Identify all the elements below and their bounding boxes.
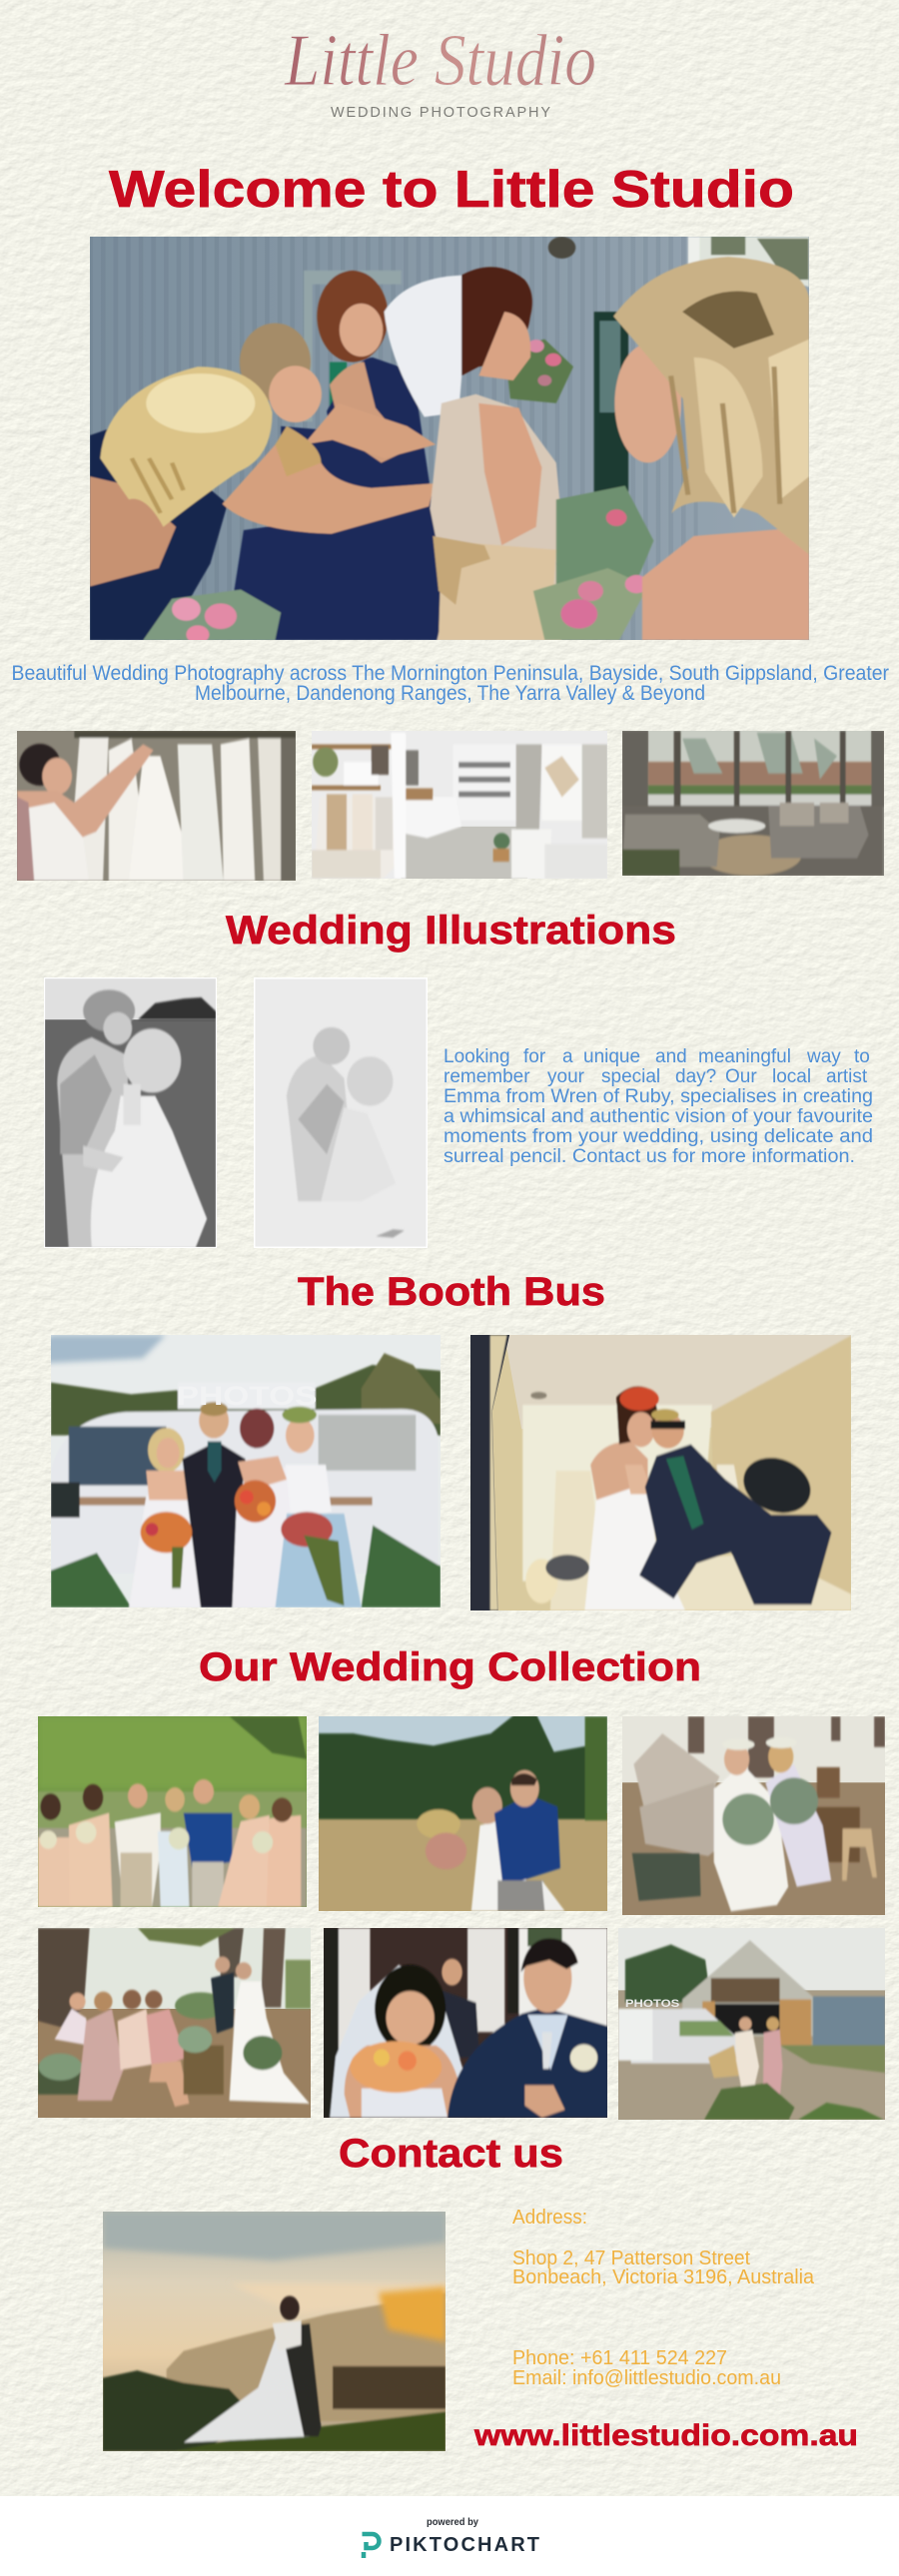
- paragraph: illustration description: Our: [725, 1066, 757, 1087]
- paragraph: illustration description: way: [806, 1046, 841, 1067]
- title: Welcome to Little Studio: [109, 161, 794, 219]
- contact details: Phone: +61 411 524 227: [512, 2347, 727, 2369]
- contact details: [512, 2207, 815, 2389]
- photo: studio lounge: [622, 731, 884, 876]
- photo: gowns on a rack: [17, 731, 296, 881]
- contact details: Shop 2, 47 Patterson Street: [512, 2248, 750, 2269]
- piktochart wordmark: PIKTOCHART: [390, 2534, 539, 2556]
- paragraph: illustration description: your: [547, 1066, 585, 1087]
- photo: brides seated on logs: [622, 1716, 885, 1915]
- paragraph: illustration description: moments from your wedding, using delicate and: [444, 1126, 873, 1147]
- footer: [0, 2496, 899, 2576]
- photo: couple inside photo booth: [470, 1335, 851, 1610]
- paragraph: illustration description: unique: [583, 1046, 640, 1067]
- photo: couple in black and white: [44, 977, 217, 1248]
- illustration: pencil drawing of couple: [254, 977, 428, 1248]
- photo: couple on cliff at sunset: [103, 2212, 446, 2451]
- powered by label: powered by: [427, 2516, 478, 2528]
- paragraph: illustration description: artist: [826, 1066, 868, 1087]
- contact details: Address:: [512, 2207, 587, 2229]
- paragraph: illustration description: to: [854, 1046, 870, 1067]
- photo: wedding party at booth bus: [51, 1335, 441, 1608]
- paragraph: illustration description: [444, 1046, 873, 1167]
- contact details: Email: info@littlestudio.com.au: [512, 2367, 781, 2389]
- tagline: [12, 662, 889, 705]
- photo: studio showroom: [312, 731, 607, 879]
- photo: bride and groom at chapel door: [324, 1928, 607, 2118]
- logo tagline: WEDDING PHOTOGRAPHY: [331, 105, 550, 121]
- tagline: Melbourne, Dandenong Ranges, The Yarra Valley & Beyond: [195, 682, 705, 705]
- paragraph: illustration description: day?: [675, 1066, 716, 1087]
- paragraph: illustration description: surreal pencil. Contact us for more information.: [444, 1146, 855, 1167]
- paragraph: illustration description: a whimsical and authentic vision of your favourite: [444, 1106, 873, 1127]
- logo script: Little Studio: Little Studio: [284, 20, 596, 102]
- paragraph: illustration description: for: [523, 1046, 546, 1067]
- heading: Our Wedding Collection: Our Wedding Collection: [199, 1645, 701, 1689]
- paragraph: illustration description: a: [562, 1046, 573, 1067]
- contact details: Bonbeach, Victoria 3196, Australia: [512, 2266, 815, 2288]
- icon: piktochart mark: [362, 2534, 380, 2558]
- paragraph: illustration description: Emma from Wren of Ruby, specialises in creating: [444, 1086, 873, 1107]
- heading: Contact us: Contact us: [339, 2132, 563, 2176]
- paragraph: illustration description: meaningful: [698, 1046, 791, 1067]
- paragraph: illustration description: and: [655, 1046, 687, 1067]
- paragraph: illustration description: special: [601, 1066, 660, 1087]
- photo: bridesmaids helping bride: [90, 237, 809, 640]
- paragraph: illustration description: Looking: [444, 1046, 510, 1067]
- photo: booth bus at barn: [618, 1928, 885, 2120]
- photo: booth bus at barn: PHOTOS: [625, 1998, 679, 2010]
- website url: www.littlestudio.com.au: [473, 2419, 858, 2452]
- logo: [284, 20, 596, 121]
- photo: wedding party at booth bus: PHOTOS: [177, 1381, 318, 1411]
- photo: couple in golden field: [319, 1716, 607, 1911]
- heading: The Booth Bus: The Booth Bus: [298, 1270, 605, 1314]
- paragraph: illustration description: local: [772, 1066, 811, 1087]
- paragraph: illustration description: remember: [444, 1066, 530, 1087]
- heading: Wedding Illustrations: Wedding Illustrations: [226, 909, 676, 953]
- photo: bridal party under trees: [38, 1716, 307, 1907]
- photo: bridesmaids and couple by the pines: [38, 1928, 311, 2118]
